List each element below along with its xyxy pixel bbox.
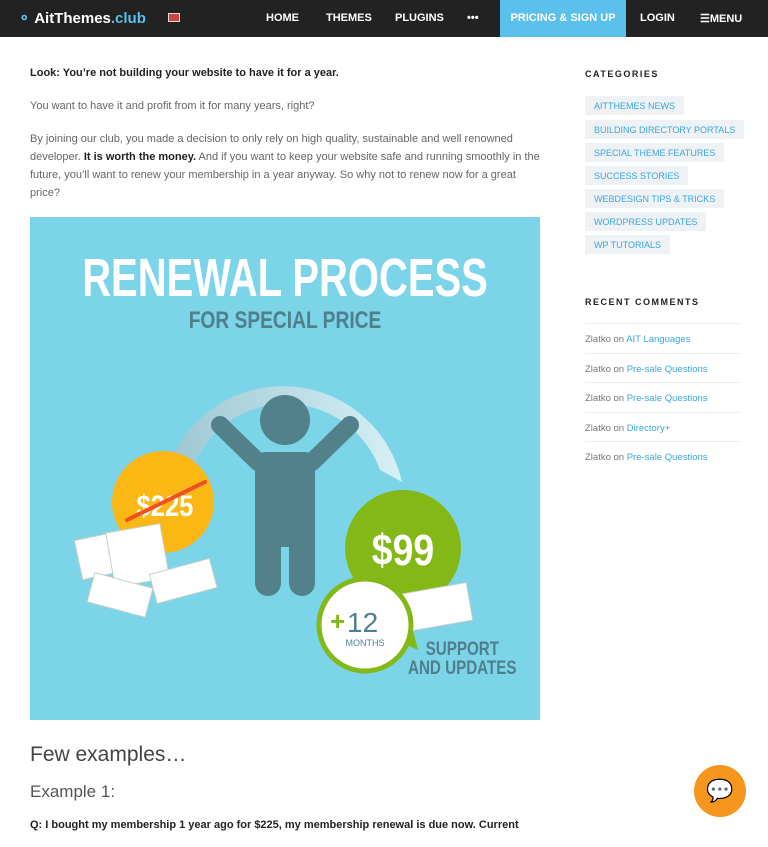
top navigation bar: HOME	[266, 12, 299, 24]
top navigation bar	[0, 0, 768, 37]
text: Zlatko on Directory+	[585, 423, 670, 434]
text: WORDPRESS UPDATES	[594, 217, 697, 227]
title: FOR SPECIAL PRICE	[189, 306, 381, 334]
title: RENEWAL PROCESS	[82, 248, 488, 309]
top navigation bar: LOGIN	[640, 12, 675, 24]
intro text: Look: You’re not building your website to have it for a year.	[30, 67, 339, 79]
flag	[168, 13, 180, 22]
support text: SUPPORT	[426, 637, 499, 659]
text: Q: I bought my membership 1 year ago for $225, my membership renewal is due now. Current	[30, 819, 519, 831]
top navigation bar: ☰MENU	[700, 13, 742, 25]
+12 months badge	[319, 579, 418, 671]
chat button	[694, 765, 746, 817]
+12 months badge: +	[330, 606, 345, 636]
top navigation bar: THEMES	[326, 12, 372, 24]
infographic	[30, 217, 540, 720]
money right	[402, 583, 473, 631]
yellow circle $225: $225	[137, 489, 193, 522]
text: BUILDING DIRECTORY PORTALS	[594, 125, 735, 135]
chat button: 💬	[706, 778, 734, 803]
top navigation bar: •••	[467, 12, 479, 24]
pricing button	[500, 0, 626, 37]
text: Zlatko on Pre-sale Questions	[585, 452, 708, 463]
+12 months badge: 12	[347, 607, 378, 638]
text: Zlatko on Pre-sale Questions	[585, 364, 708, 375]
green circle $99	[345, 490, 461, 606]
recent comments: RECENT COMMENTS	[585, 297, 700, 307]
text: Example 1:	[30, 782, 115, 801]
support text	[408, 637, 517, 678]
+12 months badge: MONTHS	[346, 638, 384, 648]
support text: AND UPDATES	[408, 656, 517, 678]
text: Zlatko on Pre-sale Questions	[585, 393, 708, 404]
money left	[74, 524, 217, 617]
top navigation bar: PLUGINS	[395, 12, 444, 24]
logo: ⚬ AitThemes.club	[18, 10, 146, 27]
yellow circle $225	[112, 451, 214, 553]
sidebar categories: CATEGORIES	[585, 69, 659, 79]
text: WP TUTORIALS	[594, 240, 661, 250]
text: By joining our club, you made a decision to only rely on high quality, sustainable and well renowned developer. It is worth the money. And if you want to keep your website safe and running smoothly in the future, you’ll want to renew your membership in a year anyway. So why not to renew now for a great price?	[30, 133, 540, 199]
text: SPECIAL THEME FEATURES	[594, 148, 715, 158]
text: WEBDESIGN TIPS & TRICKS	[594, 194, 715, 204]
examples heading: Few examples…	[30, 743, 186, 766]
pricing button: PRICING & SIGN UP	[510, 12, 616, 24]
text: You want to have it and profit from it for many years, right?	[30, 100, 315, 112]
green circle $99: $99	[372, 525, 434, 575]
text: Zlatko on AIT Languages	[585, 334, 690, 345]
text: SUCCESS STORIES	[594, 171, 679, 181]
person	[220, 395, 350, 596]
text: AITTHEMES NEWS	[594, 101, 675, 111]
